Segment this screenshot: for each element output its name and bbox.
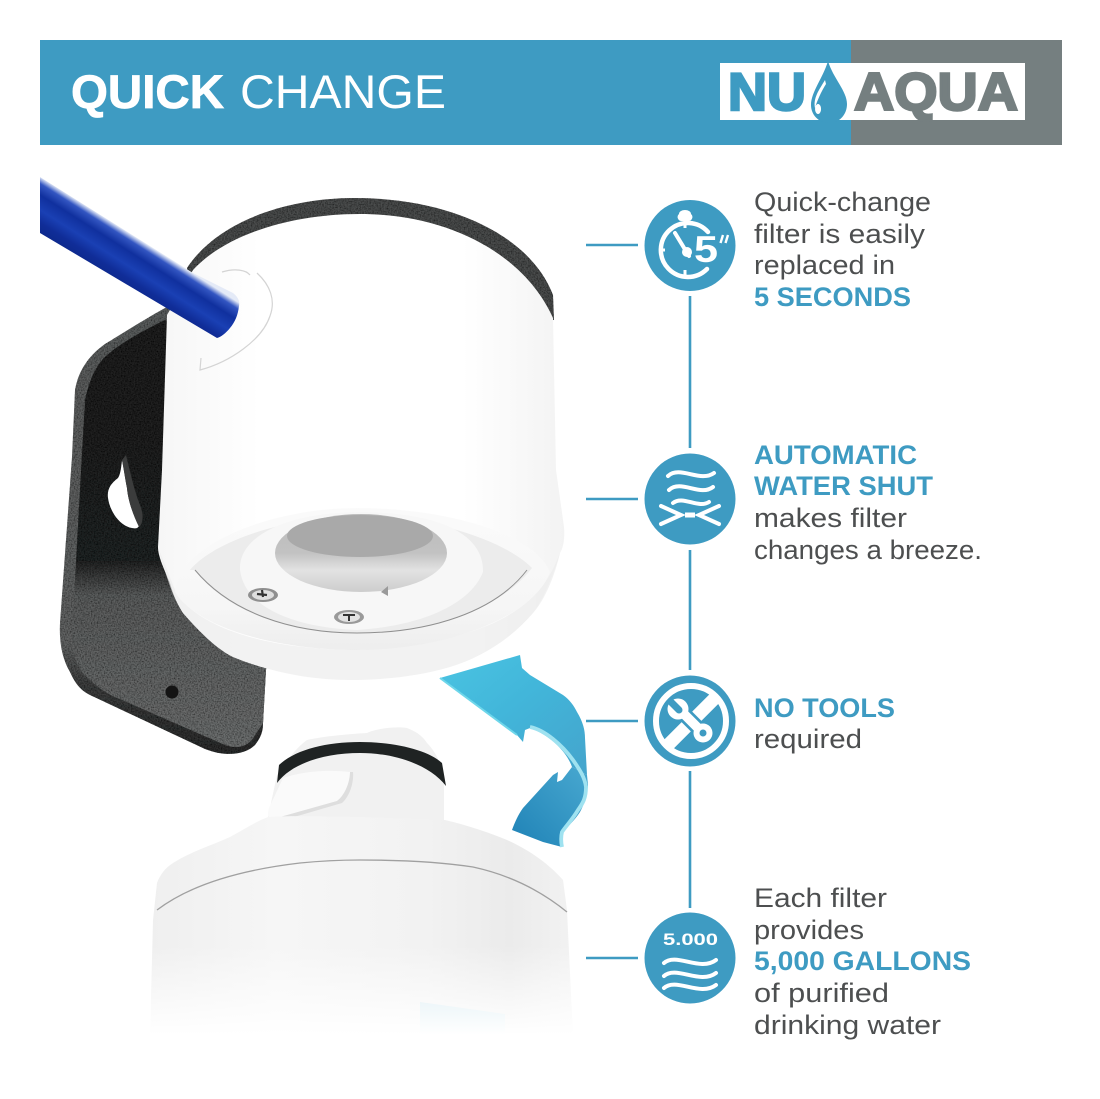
central cavity xyxy=(275,514,447,592)
screws xyxy=(248,588,364,624)
curved blue arrow xyxy=(440,655,588,847)
icon: 5,000 gallons: 5.000 xyxy=(663,930,718,949)
text block: 5,000 gallons: 5,000 GALLONS xyxy=(754,946,971,976)
text block: 5 seconds: Quick-change xyxy=(754,187,931,217)
text block: 5,000 gallons xyxy=(754,883,971,1040)
text block: no tools: NO TOOLS xyxy=(754,693,895,723)
icon: stopwatch 5 seconds: 5 xyxy=(694,229,718,270)
title: CHANGE xyxy=(240,65,446,118)
icon: no tools xyxy=(644,676,736,766)
product: tube port collar xyxy=(200,270,272,370)
icon: automatic water shut xyxy=(644,454,736,544)
logo: NU xyxy=(728,63,806,122)
icon: stopwatch 5 seconds xyxy=(644,200,736,291)
logo xyxy=(720,61,1025,123)
filter label xyxy=(420,1002,505,1040)
text block: 5 seconds: 5 SECONDS xyxy=(754,282,911,312)
product: replacement filter xyxy=(140,727,590,1042)
text block: 5 seconds: replaced in xyxy=(754,250,895,280)
header banner xyxy=(40,40,1062,145)
connector lines xyxy=(586,245,690,958)
logo: AQUA xyxy=(854,63,1018,122)
text block: automatic water shut: AUTOMATIC xyxy=(754,440,917,470)
text block: 5,000 gallons: drinking water xyxy=(754,1010,941,1040)
filter body xyxy=(150,816,573,1037)
keyhole xyxy=(108,460,139,528)
text block: automatic water shut: WATER SHUT xyxy=(754,471,934,501)
text block: automatic water shut: makes filter xyxy=(754,503,907,533)
text block: no tools xyxy=(754,693,895,754)
ring opening xyxy=(175,508,550,650)
text block: 5 seconds xyxy=(754,187,931,312)
base ring face xyxy=(158,547,560,680)
text block: 5,000 gallons: Each filter xyxy=(754,883,887,913)
product: mounting bracket xyxy=(60,290,300,754)
product: filter head xyxy=(158,214,564,680)
product: blue water tube xyxy=(40,177,239,338)
text block: 5,000 gallons: provides xyxy=(754,915,864,945)
text block: automatic water shut xyxy=(754,440,982,565)
text block: no tools: required xyxy=(754,724,862,754)
text block: 5 seconds: filter is easily xyxy=(754,219,926,249)
text block: 5,000 gallons: of purified xyxy=(754,978,889,1008)
filter neck xyxy=(268,727,444,825)
title xyxy=(71,65,446,118)
title: QUICK xyxy=(71,65,224,118)
text block: automatic water shut: changes a breeze. xyxy=(754,535,982,565)
black o-ring xyxy=(277,742,446,786)
product: dark mount plate top xyxy=(187,198,554,330)
icon: 5,000 gallons xyxy=(644,912,736,1004)
hub xyxy=(240,512,483,630)
filter lug xyxy=(268,771,353,822)
